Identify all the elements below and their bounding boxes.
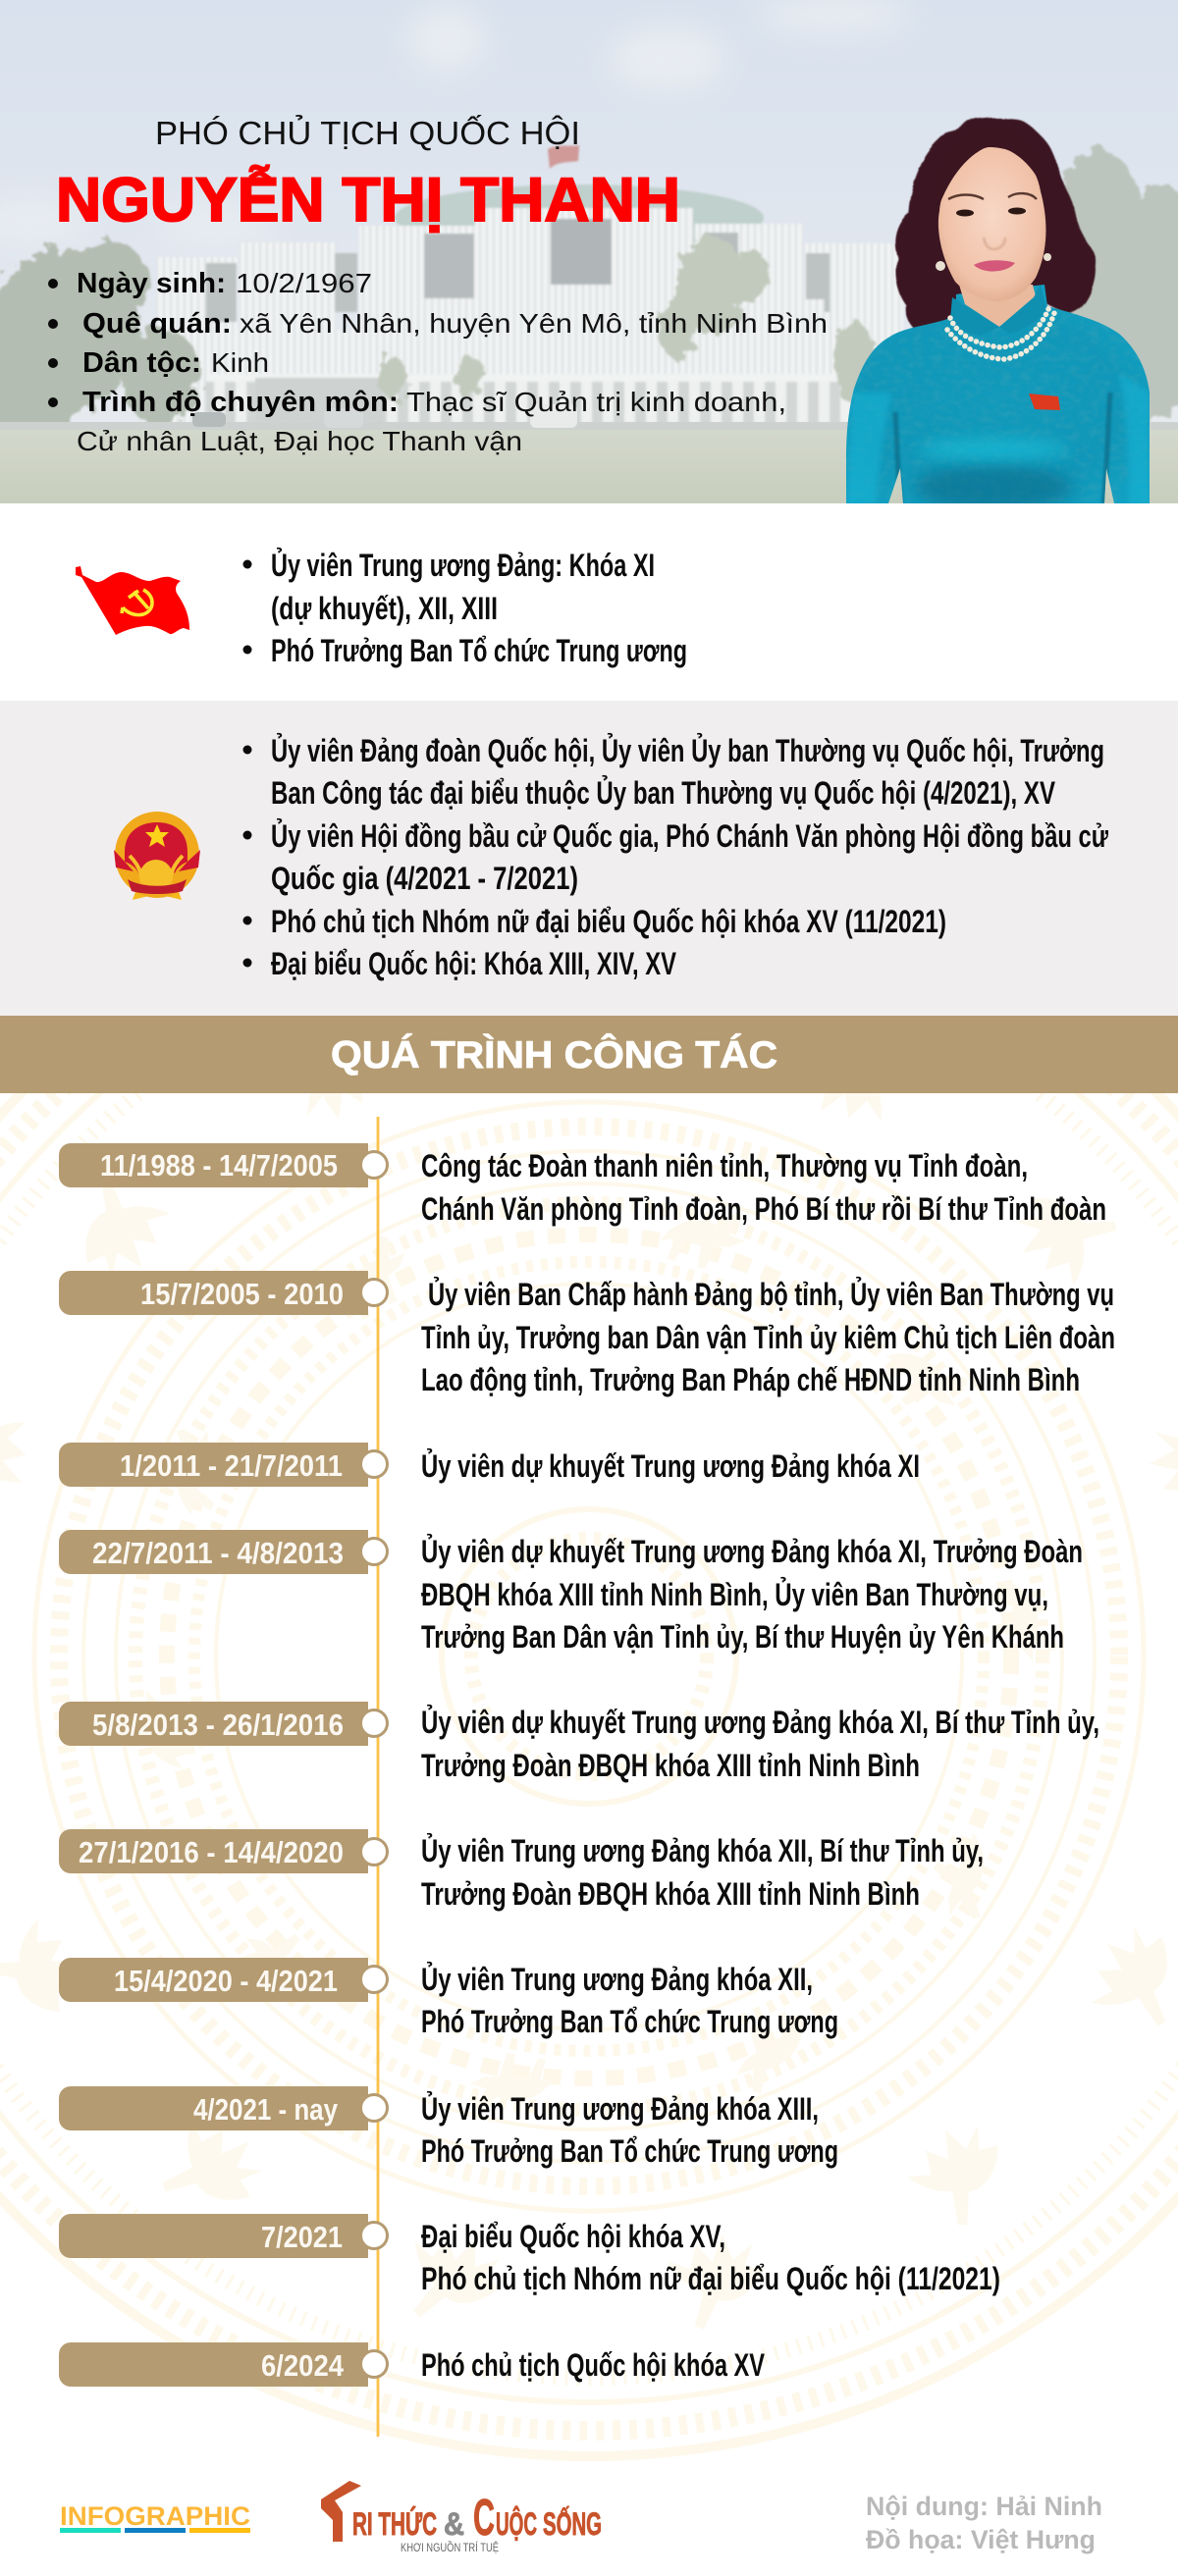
list: state positions: Đại biểu Quốc hội: Khóa XIII, XIV, XV xyxy=(271,946,676,981)
timeline entry 6: Trưởng Đoàn ĐBQH khóa XIII tỉnh Ninh Bình xyxy=(421,1876,920,1912)
footer: Tri Thức và Cuộc Sống logo: RI THỨC xyxy=(352,2506,437,2542)
timeline entry 9: Đại biểu Quốc hội khóa XV, xyxy=(421,2219,725,2254)
timeline entry 10: 6/2024 xyxy=(261,2348,345,2383)
timeline entry 9: 7/2021 xyxy=(261,2220,343,2254)
footer: Tri Thức và Cuộc Sống logo: SỐNG xyxy=(543,2506,602,2542)
ethnicity xyxy=(48,347,269,379)
footer: Tri Thức và Cuộc Sống logo: & xyxy=(444,2506,464,2542)
ethnicity: Dân tộc: xyxy=(82,347,201,379)
trees in front of the building xyxy=(379,236,874,406)
list: party positions: (dự khuyết), XII, XIII xyxy=(271,591,498,626)
title: Phó Chủ tịch Quốc hội: PHÓ CHỦ TỊCH QUỐC HỘI xyxy=(155,114,580,151)
panel: party positions xyxy=(0,503,1178,701)
timeline entry 7: Phó Trưởng Ban Tổ chức Trung ương xyxy=(421,2004,838,2039)
education xyxy=(48,387,786,456)
timeline entry 4: 22/7/2011 - 4/8/2013 xyxy=(92,1536,344,1570)
icon: communist party flag xyxy=(76,566,189,635)
name: Nguyễn Thị Thanh: NGUYỄN THỊ THANH xyxy=(56,165,680,235)
timeline entry 4 xyxy=(59,1530,1083,1655)
list: party positions xyxy=(243,548,687,668)
footer: Tri Thức và Cuộc Sống logo: KHƠI NGUỒN TRÍ TUỆ xyxy=(401,2540,499,2554)
birth date: Ngày sinh: xyxy=(77,268,226,299)
timeline entry 10 xyxy=(59,2342,765,2387)
timeline entry 10: Phó chủ tịch Quốc hội khóa XV xyxy=(421,2347,765,2383)
list: state positions xyxy=(243,733,1109,981)
list: state positions: Phó chủ tịch Nhóm nữ đại biểu Quốc hội khóa XV (11/2021) xyxy=(271,904,946,939)
sky xyxy=(0,0,1178,422)
education: Thạc sĩ Quản trị kinh doanh, xyxy=(406,387,786,417)
timeline entry 8: Phó Trưởng Ban Tổ chức Trung ương xyxy=(421,2133,838,2169)
footer: credits xyxy=(866,2492,1102,2554)
panel: state positions xyxy=(0,701,1178,1016)
road and fence xyxy=(0,422,1178,431)
lips xyxy=(974,260,1015,272)
timeline entry 5: Trưởng Đoàn ĐBQH khóa XIII tỉnh Ninh Bình xyxy=(421,1748,920,1783)
list: state positions: Quốc gia (4/2021 - 7/2021) xyxy=(271,861,578,896)
home town: xã Yên Nhân, huyện Yên Mô, tỉnh Ninh Bình xyxy=(240,308,828,339)
timeline entry 8: Ủy viên Trung ương Đảng khóa XIII, xyxy=(421,2091,819,2127)
trees right xyxy=(1043,149,1178,429)
nose xyxy=(984,237,1005,249)
neck xyxy=(959,285,1037,327)
timeline entry 8: 4/2021 - nay xyxy=(193,2092,339,2127)
timeline axis xyxy=(377,1117,379,2437)
timeline entry 6 xyxy=(59,1829,984,1912)
flag on roof xyxy=(548,145,579,169)
timeline entry 5 xyxy=(59,1702,1099,1783)
education: Cử nhân Luật, Đại học Thanh vận xyxy=(77,426,522,456)
timeline entry 9 xyxy=(59,2214,1000,2296)
education: Trình độ chuyên môn: xyxy=(82,387,399,418)
timeline entry 2 xyxy=(59,1271,1115,1397)
eyes and brows xyxy=(948,193,1037,216)
icon: national emblem xyxy=(114,812,200,900)
timeline entry 7: Ủy viên Trung ương Đảng khóa XII, xyxy=(421,1962,813,1997)
timeline entry 3: 1/2011 - 21/7/2011 xyxy=(120,1448,343,1483)
ethnicity: Kinh xyxy=(211,347,269,378)
timeline entry 6: 27/1/2016 - 14/4/2020 xyxy=(79,1835,344,1869)
home town xyxy=(48,308,828,340)
footer: Tri Thức và Cuộc Sống logo xyxy=(321,2481,602,2554)
list: party positions: Ủy viên Trung ương Đảng: Khóa XI xyxy=(271,548,655,583)
dress xyxy=(846,285,1150,503)
hair sweep over forehead xyxy=(936,128,1048,210)
footer: Tri Thức và Cuộc Sống logo: C xyxy=(473,2490,495,2547)
timeline entry 7 xyxy=(59,1958,838,2039)
timeline entry 8 xyxy=(59,2086,838,2169)
birth date xyxy=(48,268,372,299)
timeline entry 5: 5/8/2013 - 26/1/2016 xyxy=(92,1708,344,1742)
timeline entry 3: Ủy viên dự khuyết Trung ương Đảng khóa XI xyxy=(421,1448,920,1484)
dress fabric texture and shading xyxy=(844,285,1153,511)
clouds xyxy=(412,0,893,86)
delegate flag pin xyxy=(1029,394,1060,410)
face xyxy=(938,147,1045,301)
banner: Quá trình công tác xyxy=(0,1016,1178,1093)
timeline entry 6: Ủy viên Trung ương Đảng khóa XII, Bí thư Tỉnh ủy, xyxy=(421,1833,984,1868)
background: bronze drum pattern xyxy=(0,857,1178,2456)
lawn xyxy=(0,430,1178,503)
header panel with parliament building photo xyxy=(0,0,1178,503)
timeline entry 3 xyxy=(59,1443,920,1487)
home town: Quê quán: xyxy=(82,308,232,340)
trees left xyxy=(0,240,201,432)
pearl necklace xyxy=(947,304,1055,359)
hair xyxy=(894,118,1096,336)
birth date: 10/2/1967 xyxy=(236,268,372,298)
timeline entry 1 xyxy=(59,1143,1106,1227)
footer: credits: Đồ họa: Việt Hưng xyxy=(866,2525,1096,2554)
footer: Tri Thức và Cuộc Sống logo: UỘC xyxy=(496,2506,537,2542)
timeline entry 9: Phó chủ tịch Nhóm nữ đại biểu Quốc hội (11/2021) xyxy=(421,2261,1000,2296)
timeline entry 7: 15/4/2020 - 4/2021 xyxy=(114,1964,338,1998)
collar xyxy=(950,285,1046,336)
timeline entry 2: 15/7/2005 - 2010 xyxy=(140,1277,344,1311)
icon: logo letter T xyxy=(321,2481,361,2542)
personal info list xyxy=(48,268,828,456)
earrings xyxy=(936,253,1051,271)
banner: Quá trình công tác: QUÁ TRÌNH CÔNG TÁC xyxy=(331,1032,777,1077)
footer: credits: Nội dung: Hải Ninh xyxy=(866,2492,1102,2521)
list: party positions: Phó Trưởng Ban Tổ chức Trung ương xyxy=(271,633,687,668)
timeline entry 1: 11/1988 - 14/7/2005 xyxy=(100,1148,338,1183)
portrait of Nguyễn Thị Thanh xyxy=(844,118,1153,511)
parked cars xyxy=(192,404,577,428)
parliament building xyxy=(157,184,903,427)
drum bird and figure motifs xyxy=(0,974,1178,2334)
footer: infographic tag: INFOGRAPHIC xyxy=(60,2501,250,2531)
